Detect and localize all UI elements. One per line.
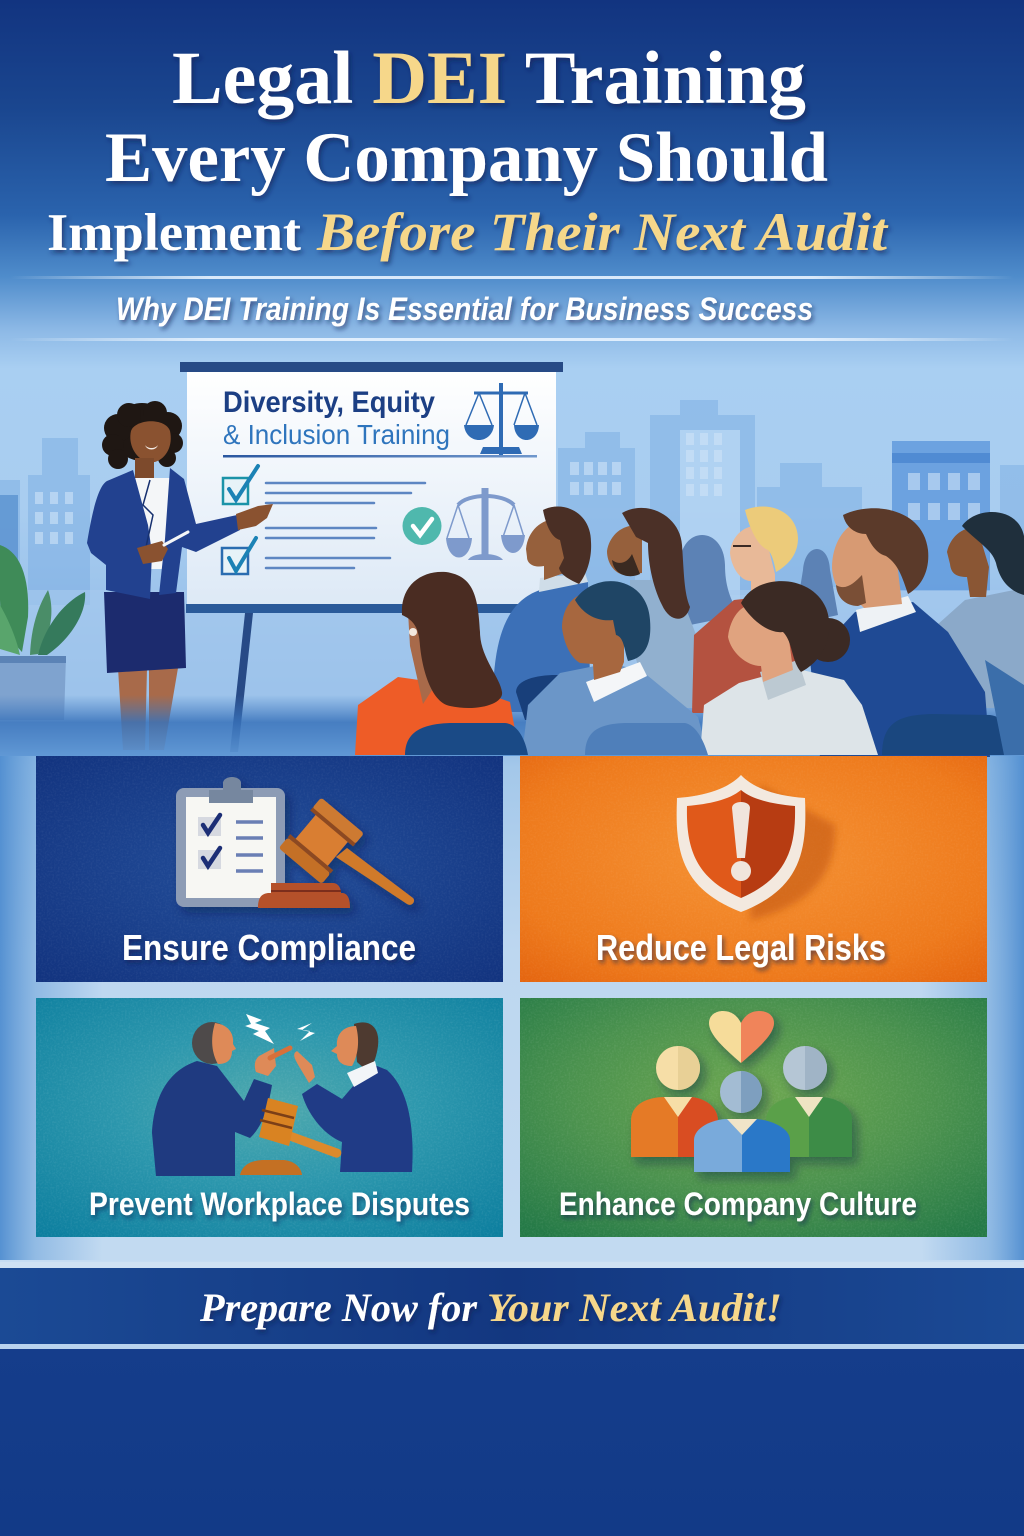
- board title: & Inclusion Training: [223, 419, 450, 450]
- card: enhance company culture: [520, 998, 987, 1237]
- person: blond man with glasses: [692, 506, 804, 713]
- title: Every Company Should: [105, 119, 828, 197]
- check badge: [402, 507, 442, 545]
- board title: [223, 386, 450, 450]
- title: Before Their Next Audit: [316, 202, 889, 262]
- label: Enhance Company Culture: [559, 1186, 917, 1222]
- board title: Diversity, Equity: [223, 386, 435, 419]
- title: Legal DEI Training: [172, 37, 806, 120]
- person: man with dark teal hair, front: [522, 581, 708, 755]
- checklist: [222, 466, 425, 574]
- banner text: Your Next Audit!: [487, 1285, 782, 1330]
- icon: arguing men with gavel: [152, 1014, 413, 1176]
- card: ensure compliance: [36, 756, 503, 982]
- person: man in blue suit, back row: [493, 507, 591, 712]
- scales icon top: [464, 383, 539, 455]
- chairs back: [516, 660, 1024, 755]
- label: Ensure Compliance: [122, 927, 416, 968]
- person: man with long hair and beard: [607, 508, 705, 708]
- banner text: Prepare Now for: [199, 1285, 477, 1330]
- divider line bottom: [10, 338, 1014, 341]
- label: Prevent Workplace Disputes: [89, 1186, 470, 1222]
- presenter: [87, 401, 273, 750]
- bottom navy area: [0, 1346, 1024, 1536]
- presentation board: [180, 362, 563, 752]
- person: right-edge woman: [937, 512, 1024, 708]
- illustration: training room: [0, 362, 1024, 757]
- room wall band: [0, 590, 1024, 755]
- person: woman with bun, front: [700, 581, 878, 755]
- title: [47, 37, 889, 262]
- banner text: [199, 1285, 782, 1330]
- city skyline: [0, 400, 1024, 610]
- silhouettes in back row: [680, 535, 838, 625]
- floor band: [0, 695, 1024, 756]
- person: bearded man in navy suit: [810, 508, 990, 757]
- title: Implement: [47, 204, 301, 262]
- icon: team and heart: [631, 1011, 852, 1172]
- call to action banner: [0, 1262, 1024, 1349]
- card: reduce legal risks: [520, 756, 987, 982]
- label: Reduce Legal Risks: [596, 927, 886, 968]
- scales icon bottom: [446, 488, 525, 560]
- chairs front: [405, 723, 708, 755]
- icon: clipboard and gavel: [176, 777, 414, 908]
- person: woman in orange top, front: [355, 572, 518, 755]
- card: prevent workplace disputes: [36, 998, 503, 1237]
- divider line top: [10, 276, 1014, 279]
- icon: shield: [677, 775, 835, 920]
- plant: [0, 545, 85, 720]
- curly hair: [102, 401, 183, 469]
- subtitle: Why DEI Training Is Essential for Business Success: [116, 291, 813, 327]
